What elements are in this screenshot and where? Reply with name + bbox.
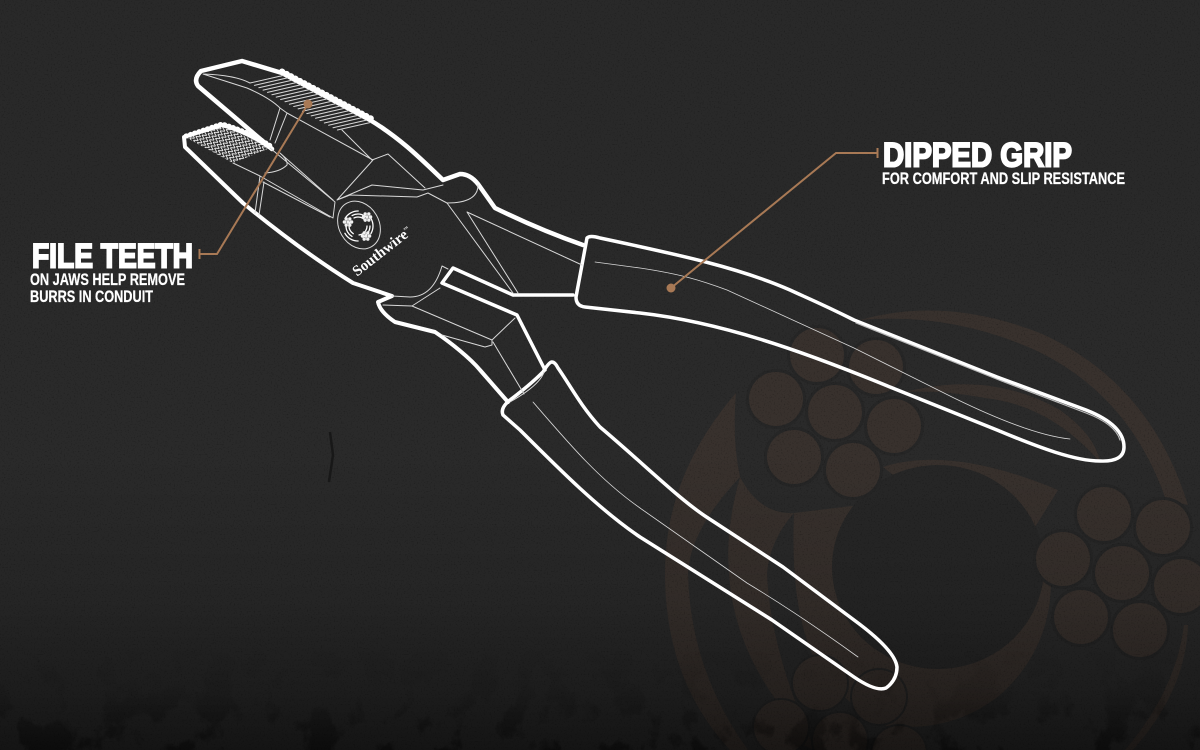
lower jaw and head lower outline — [184, 125, 508, 402]
watermark: wire strand cluster lower — [754, 656, 926, 750]
logo arcs — [343, 211, 373, 241]
watermark: dark disc — [832, 465, 1044, 669]
callout text: file teeth — [30, 238, 193, 306]
lower grip centre line — [533, 402, 858, 657]
upper grip centre line — [595, 262, 1070, 439]
watermark: swooshes — [665, 311, 1188, 750]
lower dipped grip — [502, 362, 897, 689]
callout text: file teeth: ON JAWS HELP REMOVE — [30, 271, 185, 289]
upper grip highlight — [856, 323, 1120, 440]
watermark: wire strand cluster upper — [749, 328, 921, 497]
logo strand clusters — [343, 212, 372, 241]
callout line: dipped grip — [666, 148, 878, 292]
upper dipped grip — [576, 236, 1124, 461]
head and handle detail lines — [383, 203, 582, 402]
lower jaw file mesh — [187, 126, 270, 163]
lower jaw detail lines — [233, 148, 335, 218]
callout text: file teeth: FILE TEETH — [32, 238, 193, 276]
thin construction lines — [203, 74, 1070, 657]
file teeth lines — [250, 76, 370, 130]
callout text: dipped grip: FOR COMFORT AND SLIP RESISTANCE — [882, 170, 1125, 188]
upper jaw and head outline — [196, 61, 583, 245]
small scratch marks — [329, 432, 333, 482]
callout text: dipped grip: DIPPED GRIP — [883, 136, 1072, 174]
upper jaw detail lines — [203, 74, 478, 203]
Southwire brand mark: ™ — [403, 225, 410, 233]
callout text: dipped grip — [882, 136, 1125, 188]
lower jaw serrated edge — [186, 124, 272, 147]
watermark: wire strand cluster right — [1036, 487, 1200, 657]
callout text: file teeth: BURRS IN CONDUIT — [30, 288, 153, 306]
watermark logo — [665, 311, 1200, 750]
handle metal gap edges — [442, 268, 573, 370]
pliers illustration — [184, 61, 1124, 689]
upper jaw serrated edge — [282, 72, 371, 118]
bottom edge ink blotches — [30, 727, 1109, 750]
Southwire brand mark: Southwire — [350, 227, 411, 280]
callout line: file teeth — [200, 100, 312, 259]
pivot medallion — [329, 193, 389, 257]
